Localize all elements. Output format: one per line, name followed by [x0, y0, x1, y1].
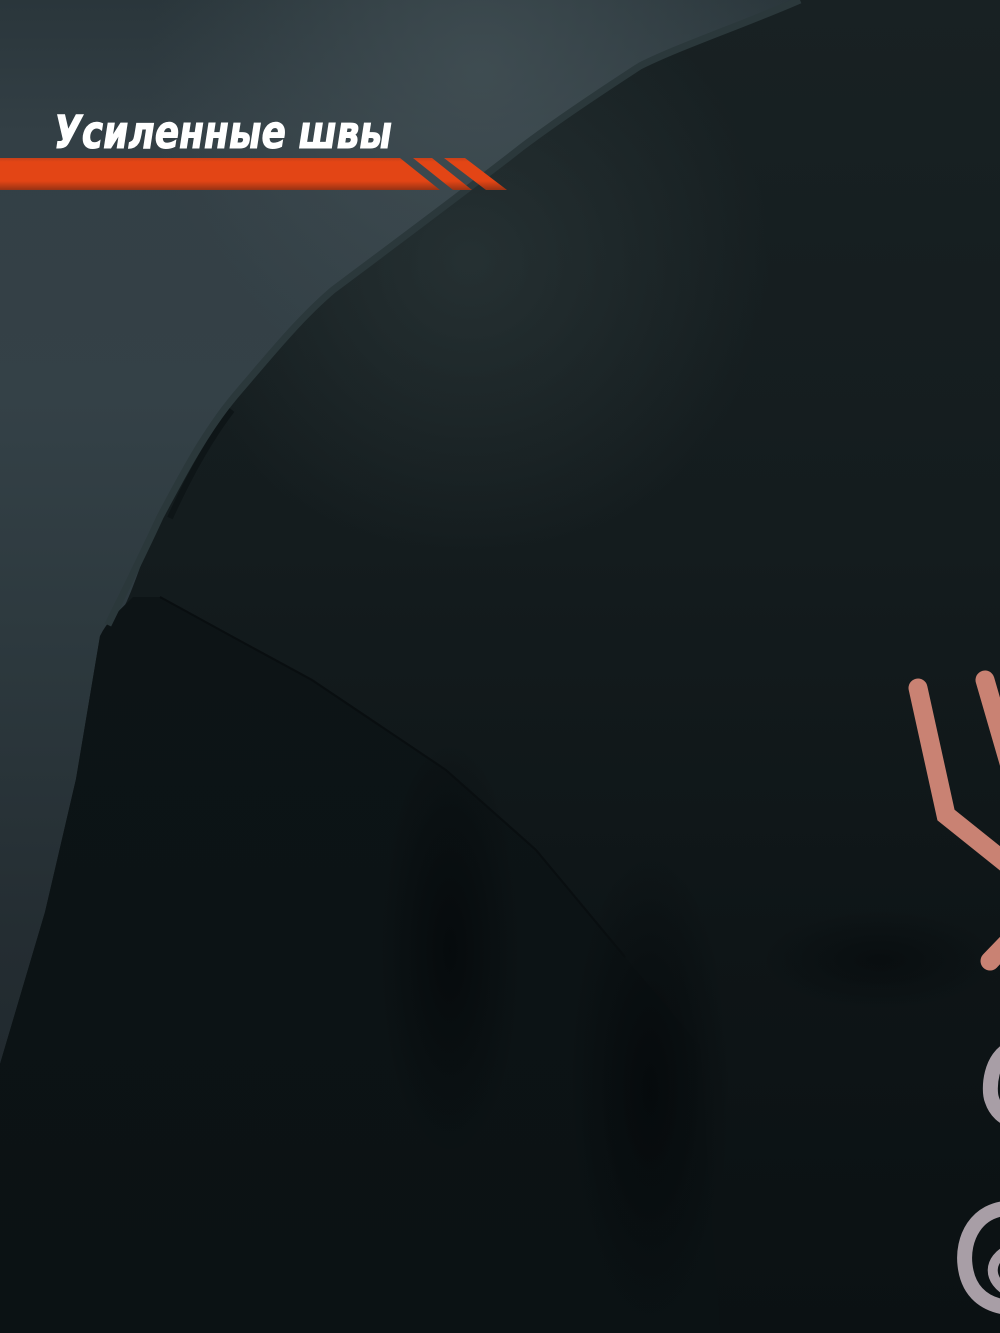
fold shadows: [447, 939, 454, 962]
shoulder trim band: [108, 0, 800, 625]
sleeve seam: [160, 596, 589, 912]
print: salmon lines: [918, 680, 1000, 961]
heading bar with stripes: [0, 158, 507, 190]
heading: Усиленные швы: [54, 106, 392, 159]
print: grey spirals: [965, 1048, 1000, 1308]
sleeve: [51, 604, 126, 886]
trim shadow: [214, 408, 234, 430]
